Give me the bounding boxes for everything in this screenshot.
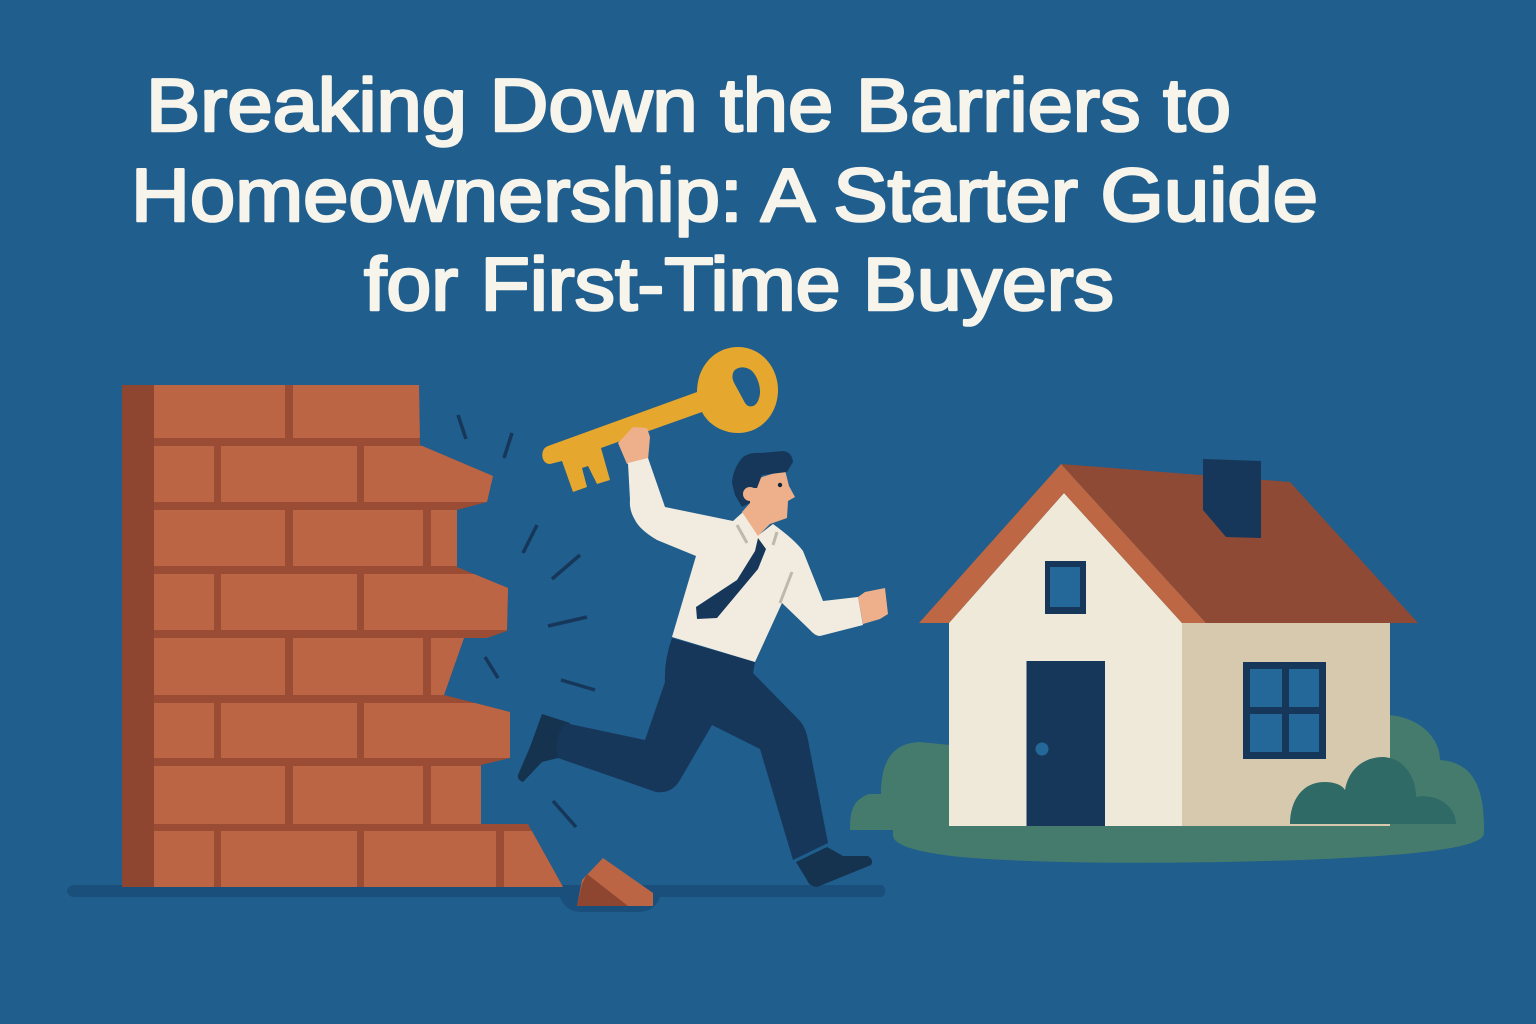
title xyxy=(131,63,1318,326)
side window xyxy=(1243,662,1326,759)
attic window xyxy=(1045,561,1086,614)
front bush xyxy=(1290,757,1456,824)
ear xyxy=(743,487,757,501)
back shoe xyxy=(518,714,570,782)
face xyxy=(742,470,795,536)
fallen brick xyxy=(577,858,653,906)
door xyxy=(1026,661,1105,826)
title: Homeownership: A Starter Guide xyxy=(131,153,1318,237)
shrubs and lawn xyxy=(850,715,1484,863)
shirt xyxy=(628,458,863,662)
shirt folds xyxy=(737,525,792,603)
raised hand xyxy=(618,427,650,464)
roof xyxy=(1061,464,1418,623)
necktie xyxy=(696,538,766,619)
eye xyxy=(778,483,782,487)
key xyxy=(542,347,778,492)
title: Breaking Down the Barriers to xyxy=(146,63,1231,147)
house xyxy=(919,459,1418,826)
trousers xyxy=(557,638,828,860)
impact lines xyxy=(458,415,595,827)
front shoe xyxy=(796,847,872,887)
front wall xyxy=(949,493,1182,826)
chimney xyxy=(1203,459,1261,538)
title: for First-Time Buyers xyxy=(364,242,1114,326)
roof edge xyxy=(919,464,1206,623)
person running xyxy=(518,427,888,887)
hair xyxy=(732,451,793,507)
forward fist xyxy=(858,588,888,624)
side wall xyxy=(1182,623,1390,826)
ground shadow xyxy=(67,885,886,912)
brick wall xyxy=(122,385,572,888)
